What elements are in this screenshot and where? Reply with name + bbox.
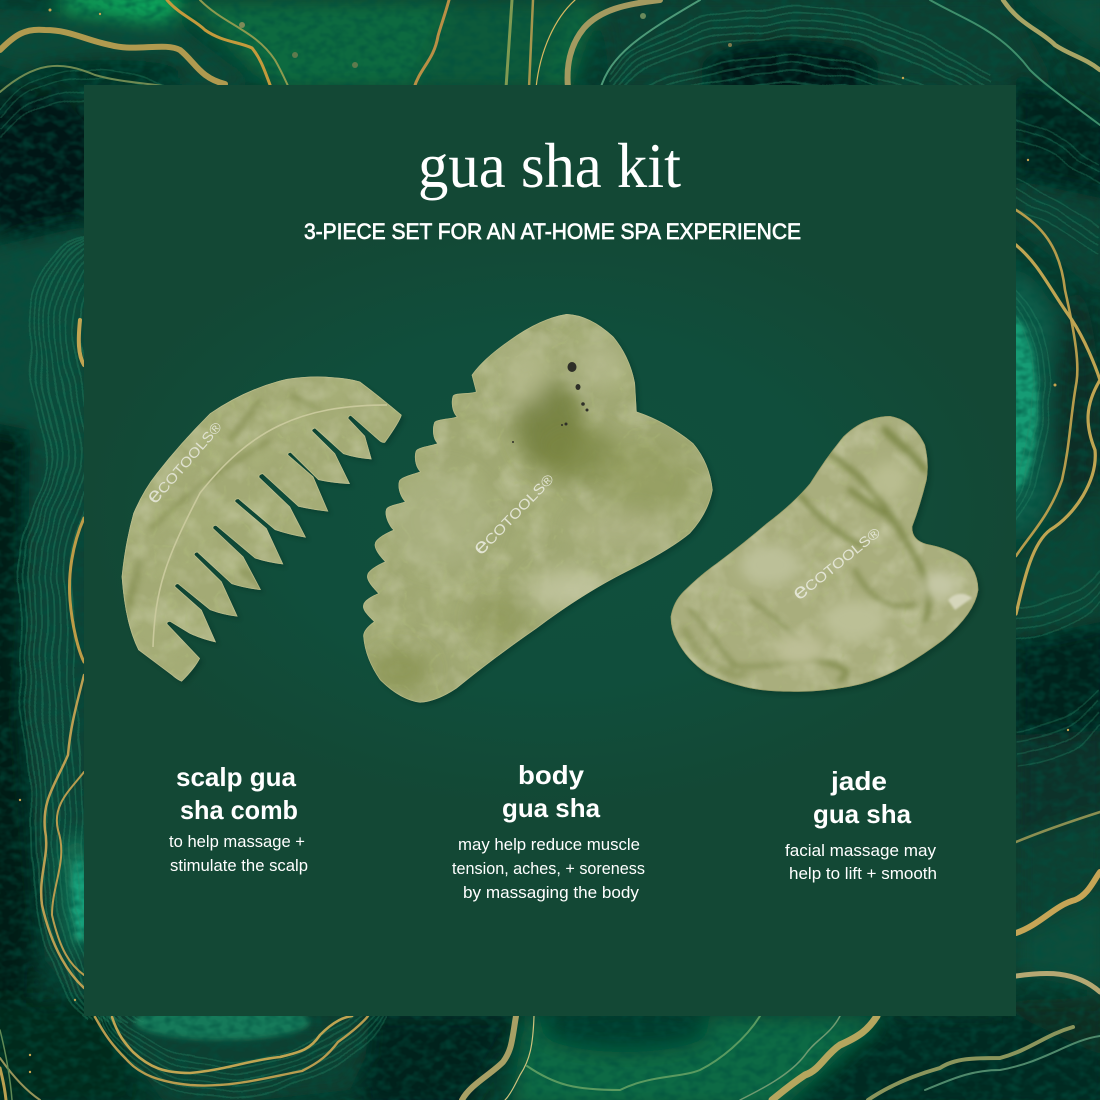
caption: body gua sha: body bbox=[518, 760, 585, 790]
caption: jade gua sha: jade bbox=[830, 766, 887, 796]
title: gua sha kit bbox=[418, 130, 681, 201]
caption: scalp gua sha comb: scalp gua bbox=[176, 762, 297, 792]
caption: body gua sha: by massaging the body bbox=[463, 883, 639, 902]
caption: body gua sha bbox=[452, 760, 645, 902]
panel glow behind stones bbox=[84, 210, 1016, 810]
caption: scalp gua sha comb: to help massage + bbox=[169, 832, 305, 851]
caption: scalp gua sha comb: stimulate the scalp bbox=[170, 856, 308, 875]
caption: jade gua sha: facial massage may bbox=[785, 841, 936, 860]
subtitle: 3-PIECE SET FOR AN AT-HOME SPA EXPERIENCE bbox=[304, 219, 801, 244]
caption: body gua sha: gua sha bbox=[502, 793, 601, 823]
caption: body gua sha: tension, aches, + soreness bbox=[452, 859, 645, 878]
caption: jade gua sha: gua sha bbox=[813, 799, 912, 829]
caption: jade gua sha bbox=[785, 766, 937, 883]
caption: body gua sha: may help reduce muscle bbox=[458, 835, 640, 854]
caption: scalp gua sha comb: sha comb bbox=[180, 795, 298, 825]
caption: jade gua sha: help to lift + smooth bbox=[789, 864, 937, 883]
icon: body gua sha bbox=[355, 305, 725, 710]
logo: comb: eCOTOOLS® bbox=[141, 415, 227, 508]
logo: body: eCOTOOLS® bbox=[468, 467, 559, 559]
icon: jade gua sha bbox=[665, 410, 985, 700]
icon: scalp gua sha comb bbox=[122, 376, 403, 682]
caption: scalp gua sha comb bbox=[169, 762, 308, 875]
logo: jade: eCOTOOLS® bbox=[788, 520, 885, 605]
panel: dark green card bbox=[84, 85, 1016, 1016]
